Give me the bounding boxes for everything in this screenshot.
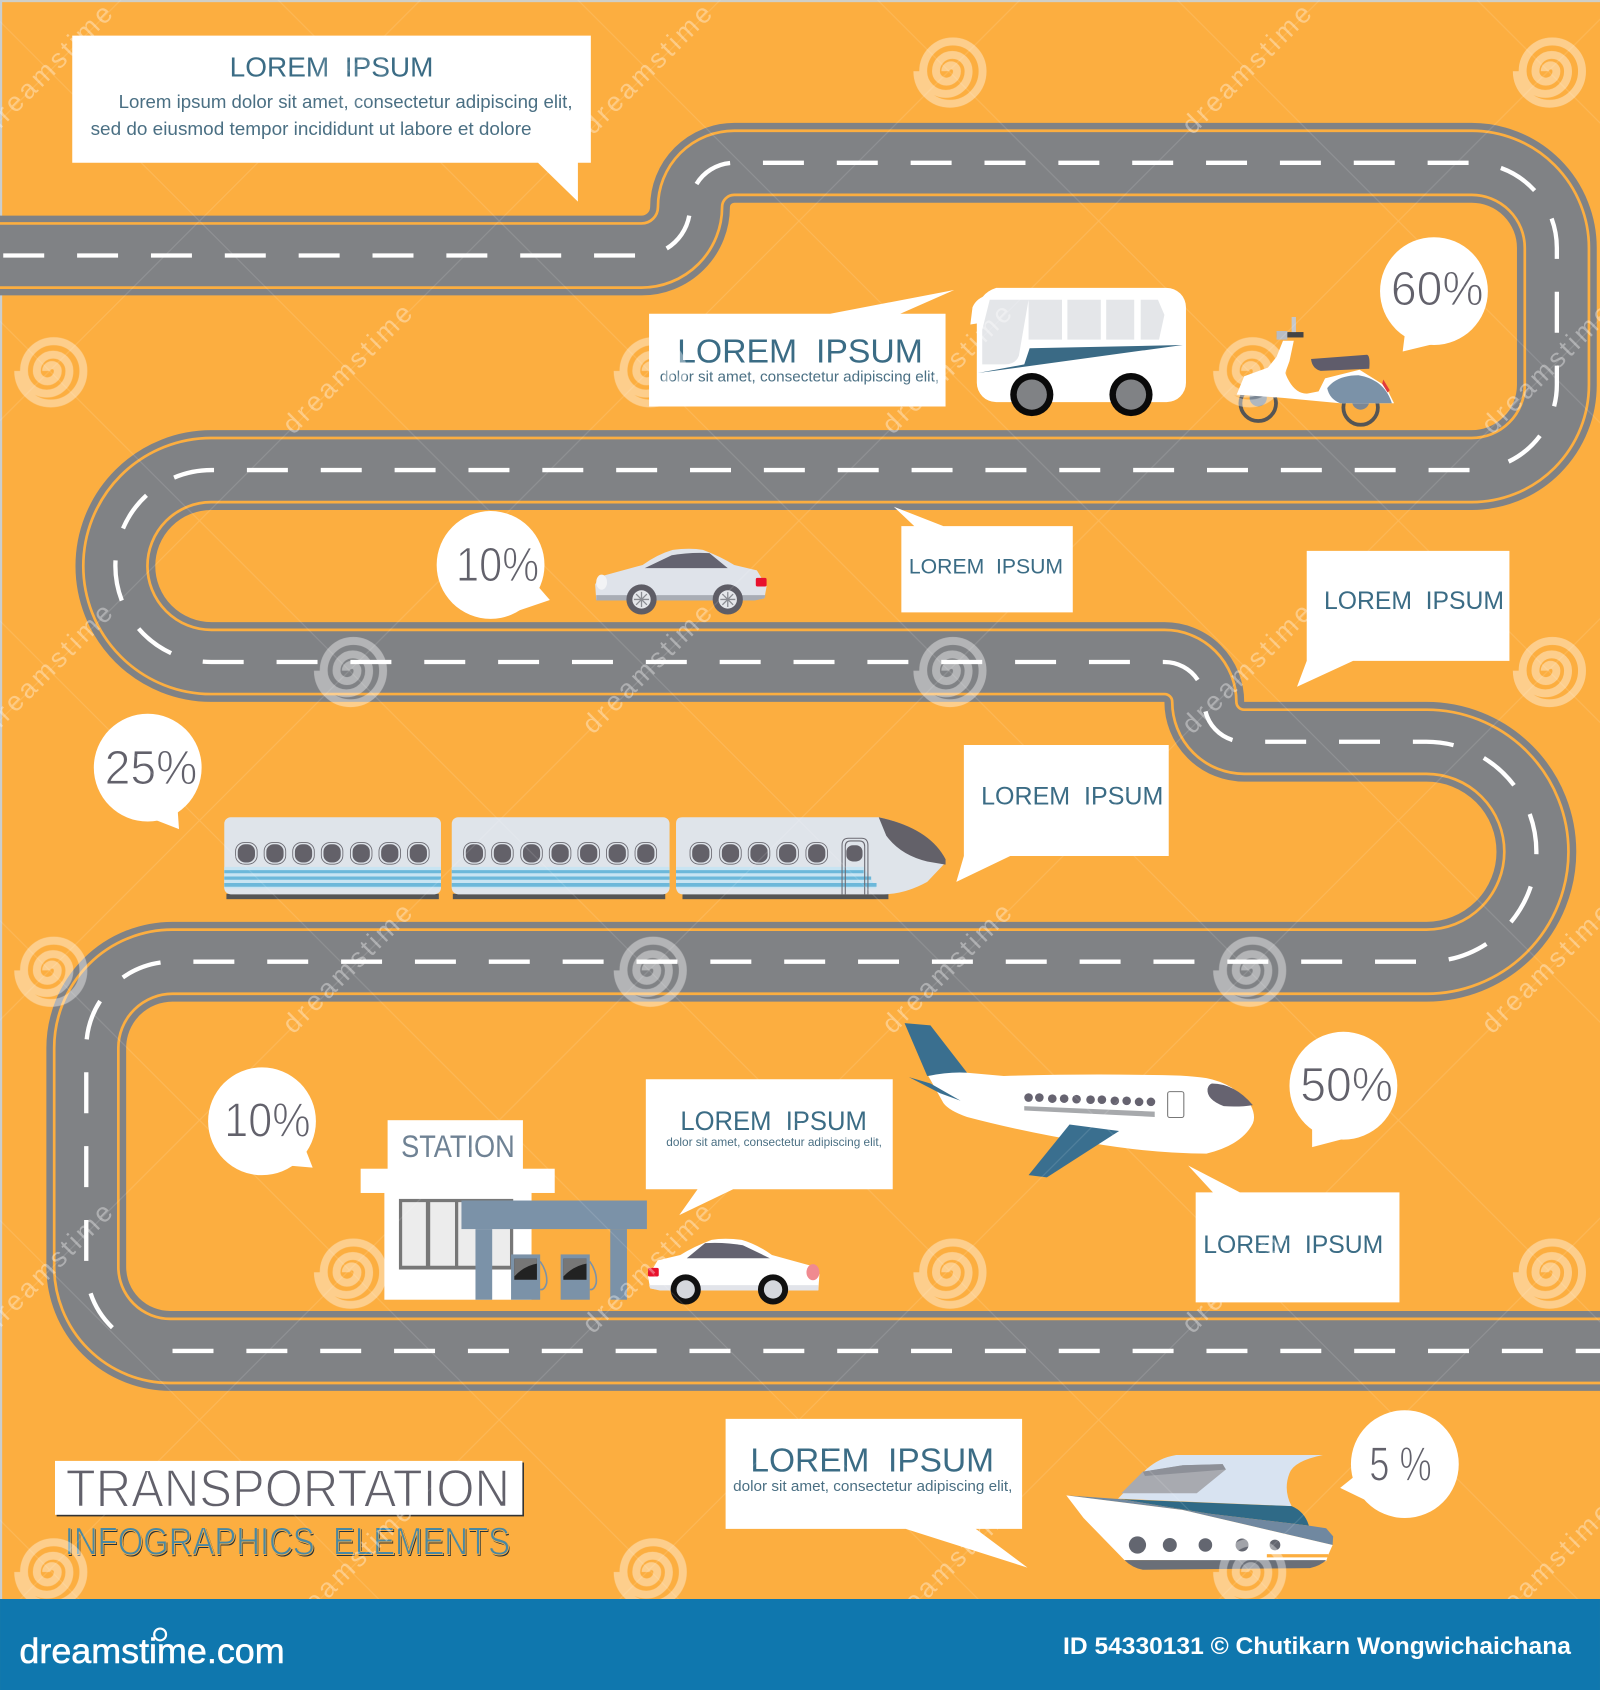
title: INFOGRAPHICS ELEMENTS bbox=[65, 1521, 510, 1564]
title bbox=[55, 1460, 524, 1565]
callout: station bbox=[646, 1079, 893, 1215]
title: TRANSPORTATION bbox=[66, 1460, 510, 1519]
callout: train bbox=[956, 745, 1169, 882]
watermark pattern: dreamstime bbox=[276, 298, 418, 440]
icon: white car bbox=[648, 1239, 819, 1305]
bubble: 10% station: 10% bbox=[224, 1093, 311, 1147]
watermark pattern: dreamstime bbox=[576, 1197, 718, 1339]
callout: station: dolor sit amet, consectetur adipiscing elit, bbox=[666, 1135, 882, 1149]
callout: boat bbox=[726, 1419, 1027, 1568]
callout: intro text: LOREM IPSUM bbox=[230, 52, 433, 83]
bubble: 25% bbox=[94, 714, 202, 829]
callout: bus bbox=[649, 290, 954, 406]
watermark pattern: dreamstime bbox=[876, 1497, 1018, 1639]
icon: yacht bbox=[1066, 1455, 1333, 1570]
watermark pattern: dreamstime bbox=[876, 298, 1018, 440]
callout: airplane: LOREM IPSUM bbox=[1203, 1232, 1383, 1259]
bubble: 60%: 60% bbox=[1391, 262, 1484, 316]
watermark pattern: dreamstime bbox=[1176, 0, 1317, 140]
icon: train bbox=[224, 817, 946, 899]
icon: scooter bbox=[1237, 317, 1394, 425]
callout: boat: LOREM IPSUM bbox=[750, 1443, 994, 1480]
callout: upper right: LOREM IPSUM bbox=[1324, 588, 1504, 615]
bubble: 10% car bbox=[437, 511, 550, 619]
road bbox=[0, 163, 1600, 1351]
icon: petrol station: STATION bbox=[401, 1129, 515, 1164]
watermark pattern: dreamstime bbox=[1176, 598, 1317, 739]
bubble: 50%: 50% bbox=[1300, 1058, 1393, 1112]
bubble: 50% bbox=[1289, 1032, 1397, 1147]
watermark pattern: dreamstime bbox=[576, 598, 718, 739]
callout: car: LOREM IPSUM bbox=[909, 554, 1063, 579]
callout: boat: dolor sit amet, consectetur adipiscing elit, bbox=[733, 1478, 1012, 1495]
bubble: 5% bbox=[1340, 1410, 1459, 1518]
icon: bus bbox=[970, 288, 1186, 416]
bubble: 60% bbox=[1380, 237, 1488, 351]
footer bar bbox=[0, 1599, 1600, 1690]
title: INFOGRAPHICS ELEMENTS bbox=[66, 1522, 511, 1565]
footer bar: ID 54330131 © Chutikarn Wongwichaichana bbox=[1063, 1634, 1572, 1660]
watermark pattern: dreamstime bbox=[876, 897, 1018, 1039]
watermark pattern: dreamstime bbox=[276, 897, 418, 1039]
callout: train: LOREM IPSUM bbox=[981, 783, 1163, 810]
icon: petrol station bbox=[361, 1120, 647, 1300]
callout: intro text: sed do eiusmod tempor incididunt ut labore et dolore bbox=[91, 118, 532, 139]
bubble: 10% station bbox=[208, 1067, 316, 1175]
bubble: 5%: 5 % bbox=[1369, 1437, 1432, 1491]
footer bar: dreamstime.com bbox=[19, 1631, 285, 1671]
callout: upper right bbox=[1297, 551, 1509, 687]
callout: airplane bbox=[1188, 1165, 1399, 1302]
icon: airplane bbox=[905, 1023, 1254, 1177]
callout: car bbox=[894, 507, 1073, 612]
watermark pattern: dreamstime bbox=[276, 1497, 418, 1639]
bubble: 25%: 25% bbox=[105, 741, 197, 795]
callout: intro text: Lorem ipsum dolor sit amet, consectetur adipiscing elit, bbox=[119, 91, 573, 112]
bubble: 10% car: 10% bbox=[456, 538, 539, 592]
icon: grey car bbox=[595, 549, 767, 615]
callout: bus: dolor sit amet, consectetur adipiscing elit, bbox=[660, 369, 939, 386]
watermark pattern: dreamstime bbox=[1176, 1197, 1317, 1339]
watermark pattern: dreamstime bbox=[576, 0, 718, 140]
callout: intro text bbox=[72, 36, 591, 202]
callout: bus: LOREM IPSUM bbox=[677, 333, 923, 370]
callout: station: LOREM IPSUM bbox=[680, 1106, 867, 1136]
